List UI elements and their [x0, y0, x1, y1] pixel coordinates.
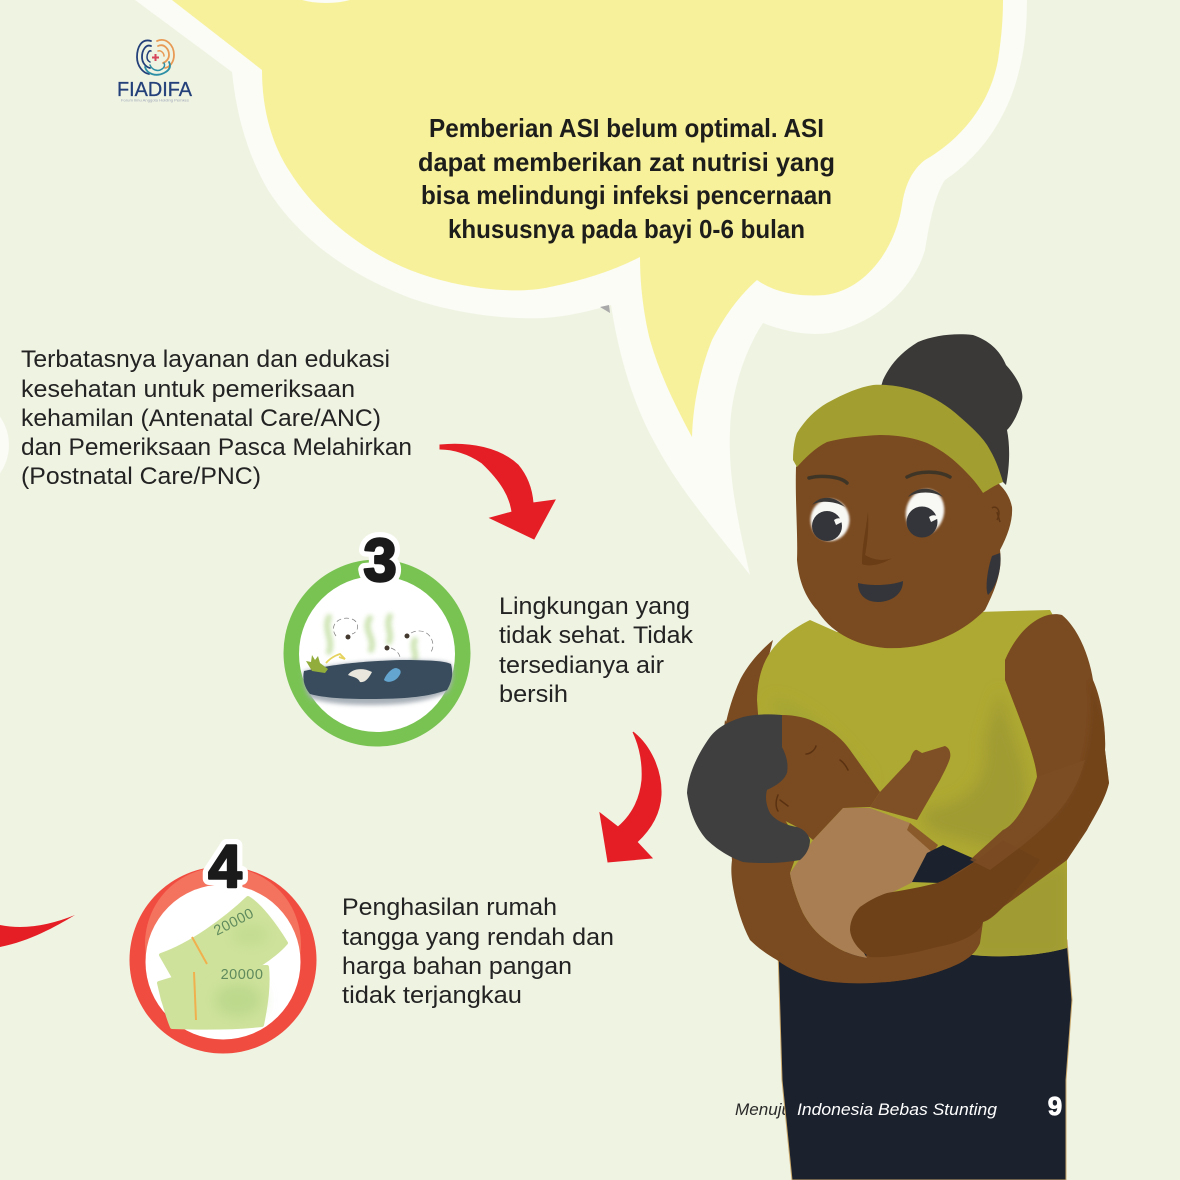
red ring	[130, 866, 316, 1054]
text block: penghasilan: harga bahan pangan	[342, 953, 572, 980]
baby: closed eye and ear	[776, 746, 848, 811]
logo cross	[152, 54, 159, 61]
heading text in bubble: bisa melindungi infeksi pencernaan	[421, 180, 832, 210]
mother: left upper arm	[722, 640, 773, 760]
text block: layanan kesehatan: kesehatan untuk pemeriksaan	[21, 376, 355, 403]
logo wordmark: FIADIFA	[117, 78, 192, 101]
small grey mark	[600, 305, 610, 313]
mother: eyes	[810, 485, 949, 541]
mother: arm shadow	[1006, 696, 1109, 904]
mother: eyebrows	[809, 472, 950, 483]
white disc	[146, 884, 300, 1040]
mother: ear and earring	[987, 553, 1000, 595]
mother: mouth	[858, 581, 903, 602]
baby: shorts	[912, 845, 977, 883]
icon: steam	[327, 616, 415, 662]
text block: penghasilan	[342, 894, 614, 1009]
text block: lingkungan: bersih	[499, 681, 568, 708]
baby: clothes	[790, 808, 937, 958]
bubble fill	[172, 0, 1003, 437]
item 3: lingkungan	[284, 527, 470, 746]
baby: sleeve	[907, 823, 938, 853]
icon: banknote top	[161, 898, 286, 976]
speech bubble	[135, 0, 1027, 575]
baby: face	[767, 715, 880, 840]
text block: lingkungan: tidak sehat. Tidak	[499, 622, 694, 649]
text block: penghasilan: tangga yang rendah dan	[342, 924, 614, 951]
mother: shirt	[757, 610, 1068, 960]
bubble outline	[135, 0, 1027, 575]
heading text in bubble: khususnya pada bayi 0-6 bulan	[448, 214, 805, 244]
text block: layanan kesehatan: dan Pemeriksaan Pasca Melahirkan	[21, 434, 412, 461]
number 4: 4	[208, 833, 242, 900]
mother: forearm and hand	[850, 840, 1040, 957]
logo mark	[137, 40, 174, 75]
number 3 weight: 3	[363, 527, 397, 594]
ring highlight	[145, 867, 301, 960]
green ring	[284, 560, 470, 746]
arrow: partial at left edge	[0, 915, 75, 947]
icon: banknote top: 20000	[211, 906, 257, 939]
white circle at left edge	[0, 395, 9, 495]
item 4: penghasilan	[130, 833, 316, 1054]
text block: layanan kesehatan: (Postnatal Care/PNC)	[21, 463, 261, 490]
mother: bun	[880, 334, 1022, 485]
white disc	[299, 576, 455, 732]
text block: penghasilan: tidak terjangkau	[342, 982, 522, 1009]
baby: hair	[687, 714, 810, 863]
number 4 weight: 4	[208, 833, 242, 900]
heading text in bubble: dapat memberikan zat nutrisi yang	[418, 147, 835, 177]
arrow: to item 4	[600, 732, 661, 862]
mother: ear mark	[992, 507, 1000, 522]
logo: FIADIFA	[117, 40, 192, 102]
heading text in bubble	[418, 113, 835, 244]
number 3: 3	[363, 527, 397, 594]
mother: face	[796, 425, 1012, 648]
text block: lingkungan: tersedianya air	[499, 652, 664, 679]
icon: dirty pond	[303, 660, 453, 705]
icon: banknote bottom	[159, 967, 268, 1028]
mother: headband	[793, 385, 1003, 493]
heading text in bubble: Pemberian ASI belum optimal. ASI	[429, 113, 824, 143]
footer text white part: Indonesia Bebas Stunting	[797, 1100, 998, 1119]
mother: arm highlight	[970, 760, 1085, 870]
top pale rim	[290, 0, 362, 3]
mother: lower arm wrap	[723, 720, 980, 983]
logo tagline: Forum Ilmu Anggota Holding Pemkes	[121, 98, 189, 102]
icon: banknote bottom: 20000	[221, 967, 263, 983]
text block: penghasilan: Penghasilan rumah	[342, 894, 557, 921]
mother: trousers	[778, 940, 1072, 1180]
illustration: mother and baby	[687, 334, 1112, 1180]
icon: flies	[333, 618, 433, 657]
icon: blue bottle	[384, 668, 401, 682]
baby: arm	[870, 746, 950, 820]
footer text dark part: Menuju	[735, 1100, 792, 1119]
text block: lingkungan: Lingkungan yang	[499, 593, 690, 620]
arrow: to item 3	[440, 444, 555, 539]
mother: right arm	[860, 614, 1109, 982]
text block: layanan kesehatan: kehamilan (Antenatal Care/ANC)	[21, 405, 381, 432]
text block: lingkungan	[499, 593, 694, 708]
icon: rock	[348, 669, 372, 682]
text block: layanan kesehatan: Terbatasnya layanan dan edukasi	[21, 346, 390, 373]
page number: 9	[1048, 1091, 1062, 1121]
text block: layanan kesehatan	[21, 346, 412, 490]
icon: plant	[306, 655, 328, 673]
mother: nose	[862, 512, 892, 565]
icon: wilted flower	[326, 654, 345, 663]
